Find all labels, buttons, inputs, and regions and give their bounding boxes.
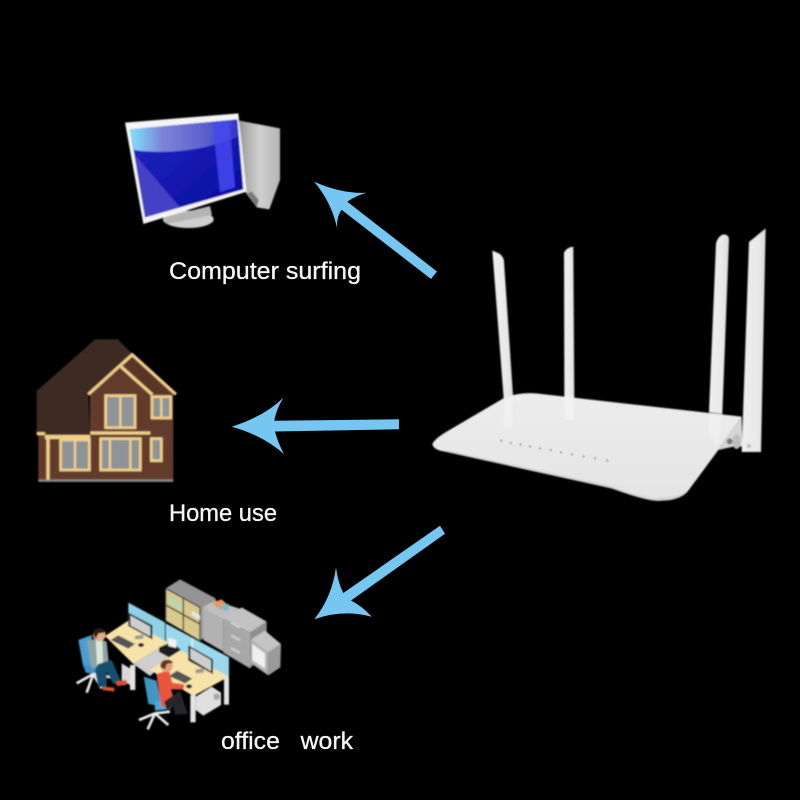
printer — [159, 642, 181, 657]
desks — [105, 621, 168, 664]
icon: house — [37, 339, 176, 481]
antenna 2 — [564, 247, 574, 398]
icon: desktop computer — [125, 113, 280, 228]
icon: office workers — [77, 579, 281, 729]
arrow: router to office — [314, 526, 445, 619]
antenna bases on body — [504, 397, 513, 427]
router body — [432, 393, 742, 501]
router — [432, 228, 766, 501]
antenna 1 — [492, 251, 513, 403]
person left — [77, 628, 127, 693]
arrow: router to computer — [314, 182, 437, 279]
keyboards — [111, 635, 135, 649]
antenna 3 — [709, 234, 729, 414]
label: home use: Home use — [169, 500, 277, 527]
arrow: router to home — [232, 398, 399, 454]
person right — [139, 660, 188, 729]
pc towers — [122, 663, 130, 685]
label: computer surfing: Computer surfing — [169, 258, 361, 285]
indicator LEDs — [500, 440, 608, 462]
cabinets — [203, 599, 281, 675]
monitors — [128, 613, 152, 639]
shelf — [166, 579, 216, 641]
label: office work: office work — [221, 728, 354, 755]
antenna 4 — [742, 228, 766, 452]
roof trim — [37, 355, 176, 481]
windows — [61, 396, 171, 470]
partitions — [128, 603, 165, 642]
